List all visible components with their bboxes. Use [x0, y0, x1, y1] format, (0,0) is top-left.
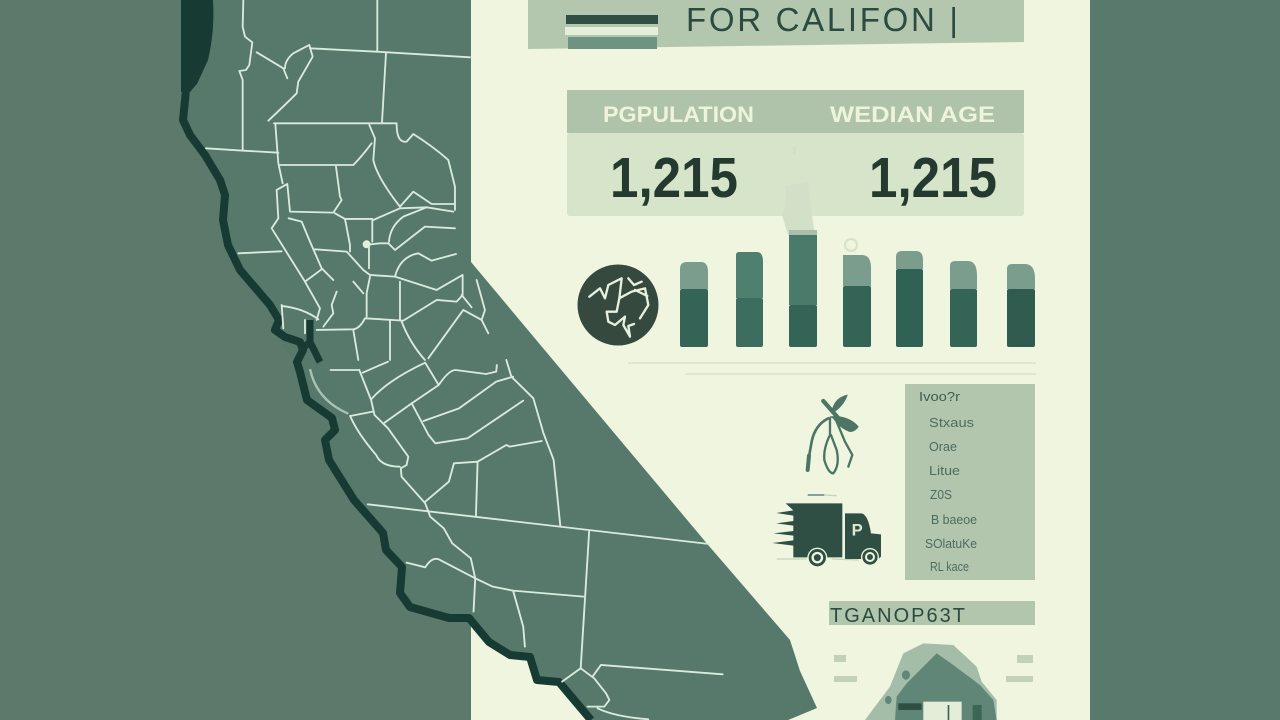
panel: transport — [829, 601, 1035, 720]
county lines: south — [310, 360, 723, 719]
dark bay inlet — [303, 320, 320, 362]
bar 4 — [843, 239, 871, 347]
icon: plant — [808, 395, 858, 473]
label: median age: WEDIAN AGE — [830, 102, 995, 127]
panel: key statistics — [567, 90, 1024, 235]
bar 2 — [736, 252, 763, 347]
bar 5 — [896, 251, 923, 347]
banner stripes icon — [565, 15, 658, 49]
list items: B baeoe — [931, 513, 977, 527]
bar 6 — [950, 261, 977, 347]
building illustration — [865, 643, 997, 720]
list items — [919, 390, 977, 574]
side marks — [834, 655, 1033, 682]
value: population: 1,215 — [610, 146, 738, 210]
transport heading: TGANOP63T — [830, 605, 965, 627]
baseline rules — [628, 363, 1036, 374]
title: FOR CALIFON | — [686, 1, 958, 38]
right background strip — [1090, 0, 1280, 720]
label: population: PGPULATION — [603, 102, 754, 127]
list items: Litue — [929, 464, 960, 478]
banner background — [528, 0, 1024, 49]
list items: Z0S — [930, 488, 952, 502]
north coast dark block — [181, 0, 213, 92]
divider smudge — [782, 146, 815, 235]
map: California land shape with county lines — [181, 0, 817, 720]
list items: Stxaus — [929, 416, 974, 430]
coastline — [183, 90, 591, 720]
list items: RL kace — [930, 560, 969, 574]
cab letter: P — [852, 521, 863, 540]
transport heading bar — [829, 601, 1035, 625]
list items: SOlatuKe — [925, 537, 977, 551]
stats header — [567, 90, 1024, 133]
icon: circular map badge — [578, 264, 658, 346]
bar 3 — [789, 230, 817, 347]
panel: list — [905, 384, 1035, 580]
value: median age: 1,215 — [869, 146, 997, 210]
land mass — [181, 0, 817, 720]
motion lines — [808, 492, 824, 497]
bar 7 — [1007, 264, 1035, 347]
bar 1 — [680, 262, 708, 347]
truck body — [772, 503, 842, 557]
bar chart with circular map icon — [578, 230, 1036, 374]
wheels — [807, 548, 879, 568]
icon: delivery truck — [772, 495, 881, 568]
header banner — [528, 0, 1024, 49]
county lines: north — [206, 0, 488, 360]
list items: Ivoo?r — [919, 390, 960, 404]
list items: Orae — [929, 440, 957, 454]
list background — [905, 384, 1035, 580]
panel: cream content sheet — [471, 0, 1090, 720]
stats body — [567, 133, 1024, 216]
truck cab — [845, 513, 881, 559]
